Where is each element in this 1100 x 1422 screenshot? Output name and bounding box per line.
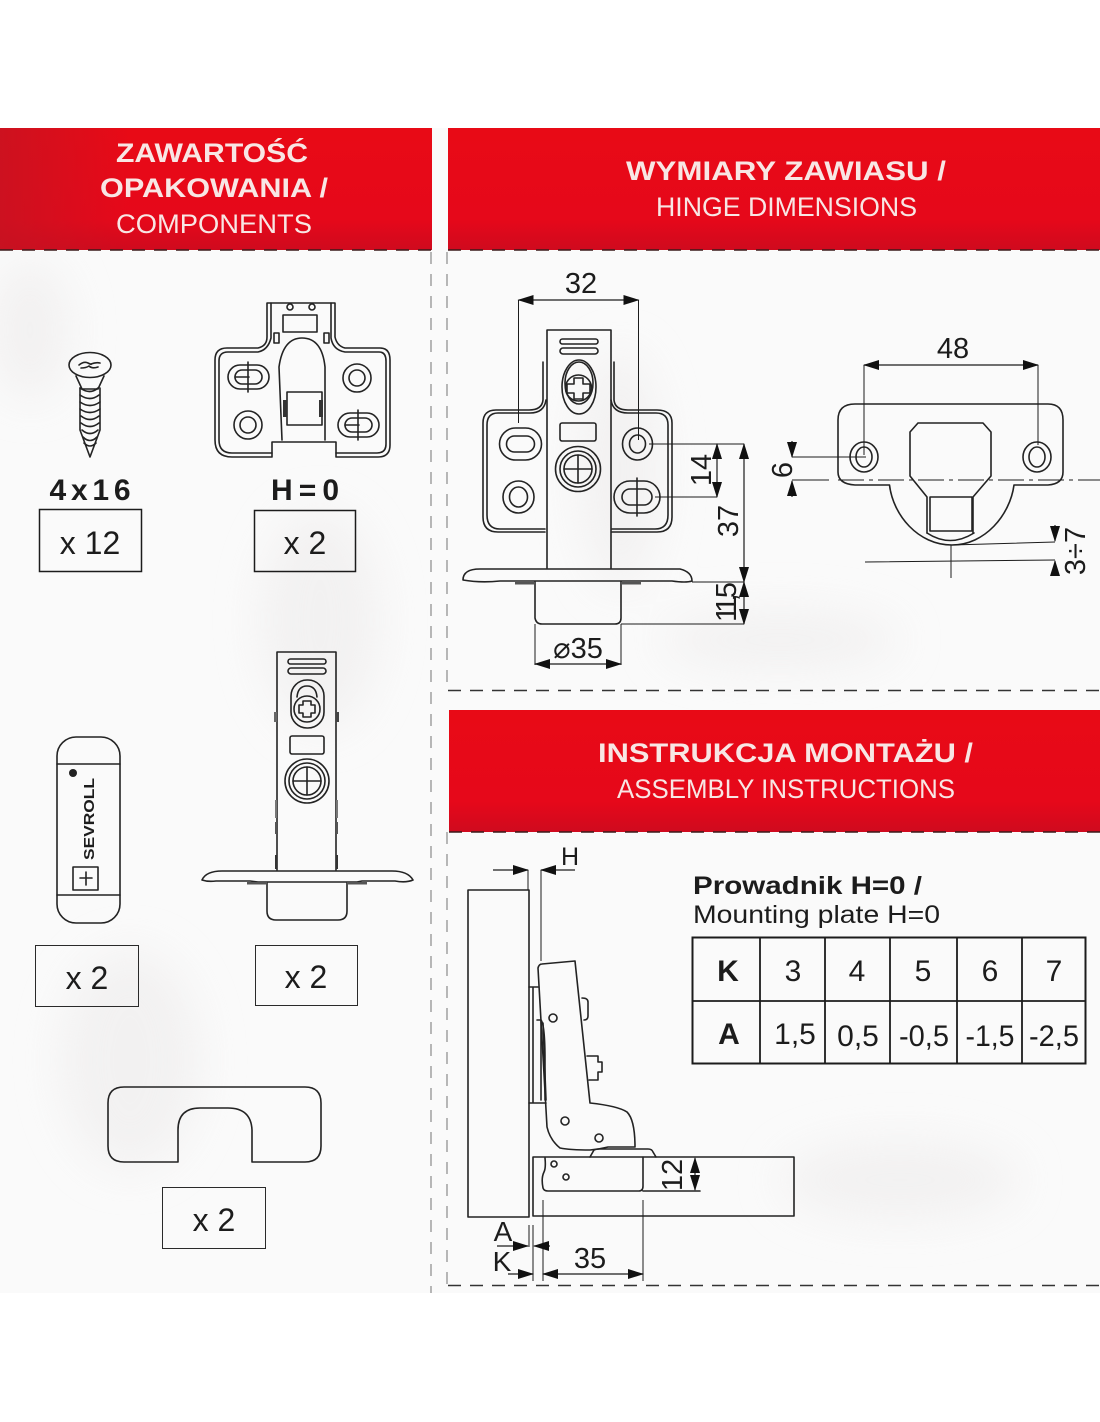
red header: hinge dimensions <box>448 128 1100 250</box>
quantity box: x2 hinge <box>256 946 358 1006</box>
quantity box: x2 cover <box>162 1188 266 1248</box>
heading: mounting plate: Prowadnik H=0 / <box>693 872 922 900</box>
table: K and A values: 4 <box>849 955 865 988</box>
quantity box: x2 cap <box>36 946 138 1006</box>
quantity box: x12 <box>40 510 142 572</box>
quantity box: x2 hinge: x 2 <box>285 959 327 995</box>
red header: components <box>0 128 432 250</box>
table: K and A values: 0,5 <box>837 1020 879 1053</box>
dimension: 32 <box>518 300 638 440</box>
label: H=0: H=0 <box>271 474 339 507</box>
diagram: hinge installed on cabinet <box>468 843 794 1281</box>
dimension: diameter 35 <box>535 624 621 665</box>
diagram: hinge installed on cabinet: H <box>561 843 579 871</box>
diagram: hinge top view with dimensions: 14 <box>686 454 718 486</box>
red header: assembly instructions: ASSEMBLY INSTRUCTIONS <box>617 774 955 804</box>
diagram: hinge top view with dimensions: ⌀35 <box>553 633 603 665</box>
diagram: hinge installed on cabinet: 12 <box>657 1159 689 1191</box>
dimension: 6 <box>792 457 866 480</box>
quantity box: x12: x 12 <box>60 525 120 561</box>
dimensions: A, K, 35 <box>529 1200 643 1281</box>
dimension: H <box>528 870 541 961</box>
table: K and A values: A <box>718 1018 740 1051</box>
heading: mounting plate <box>693 872 940 929</box>
icon: hinge side view <box>202 652 413 920</box>
quantity box: x2 cover: x 2 <box>193 1202 235 1238</box>
quantity box: x2 plate: x 2 <box>284 525 326 561</box>
table: K and A values: -2,5 <box>1029 1020 1079 1053</box>
label: 4x16: 4x16 <box>50 474 130 507</box>
diagram: hinge installed on cabinet: K <box>493 1246 512 1277</box>
diagram: hinge installed on cabinet: 35 <box>574 1243 606 1275</box>
table: K and A values: K <box>717 955 739 988</box>
red header: hinge dimensions: HINGE DIMENSIONS <box>656 192 917 222</box>
quantity box: x2 cap: x 2 <box>66 960 108 996</box>
red header: components: OPAKOWANIA / <box>100 173 329 203</box>
diagram: mounting plate with dimensions: 6 <box>767 462 799 478</box>
table: K and A values: 3 <box>785 955 801 988</box>
icon: Sevroll cover cap: SEVROLL <box>81 778 98 860</box>
base plate and cup <box>463 569 692 582</box>
table: K and A values <box>692 937 1086 1064</box>
diagram: mounting plate with dimensions <box>767 333 1100 578</box>
diagram: hinge top view with dimensions: 32 <box>565 268 597 300</box>
table: K and A values: -0,5 <box>899 1020 949 1053</box>
quantity box: x2 plate <box>254 510 356 572</box>
diagram: mounting plate with dimensions: 48 <box>937 333 969 365</box>
icon: flat plate cover <box>108 1087 321 1162</box>
wings <box>483 362 545 532</box>
table: K and A values: 1,5 <box>774 1018 816 1051</box>
diagram: hinge installed on cabinet: A <box>494 1216 513 1247</box>
red header: assembly instructions: INSTRUKCJA MONTAŻU / <box>598 738 974 768</box>
diagram: hinge top view with dimensions: 37 <box>713 505 745 537</box>
cut lines <box>0 250 1100 1293</box>
icon: Sevroll cover cap <box>57 737 120 923</box>
red header: components: ZAWARTOŚĆ <box>116 137 308 168</box>
red header: hinge dimensions: WYMIARY ZAWIASU / <box>626 156 947 186</box>
dimension: 3÷7 <box>865 542 1055 578</box>
diagram: hinge top view with dimensions <box>463 268 745 665</box>
red header: components: COMPONENTS <box>116 209 312 239</box>
diagram: hinge top view with dimensions: 11,5 <box>711 582 743 622</box>
panel: components <box>0 128 432 1248</box>
dimensions: 14 and 37 <box>621 444 744 624</box>
dimension: 48 <box>864 365 1038 455</box>
icon: screw 4x16 <box>69 352 111 457</box>
table: K and A values: 7 <box>1046 955 1062 988</box>
table: K and A values: 6 <box>982 955 998 988</box>
dimension: 12 <box>694 1158 696 1175</box>
table: K and A values: -1,5 <box>966 1020 1014 1053</box>
diagram: mounting plate with dimensions: 3÷7 <box>1060 527 1092 575</box>
red header: assembly instructions <box>449 710 1100 832</box>
panel: hinge dimensions <box>448 128 1100 665</box>
panel: assembly instructions <box>449 710 1100 1281</box>
heading: mounting plate: Mounting plate H=0 <box>693 901 940 929</box>
icon: mounting plate top view <box>215 303 390 457</box>
table: K and A values: 5 <box>915 955 931 988</box>
